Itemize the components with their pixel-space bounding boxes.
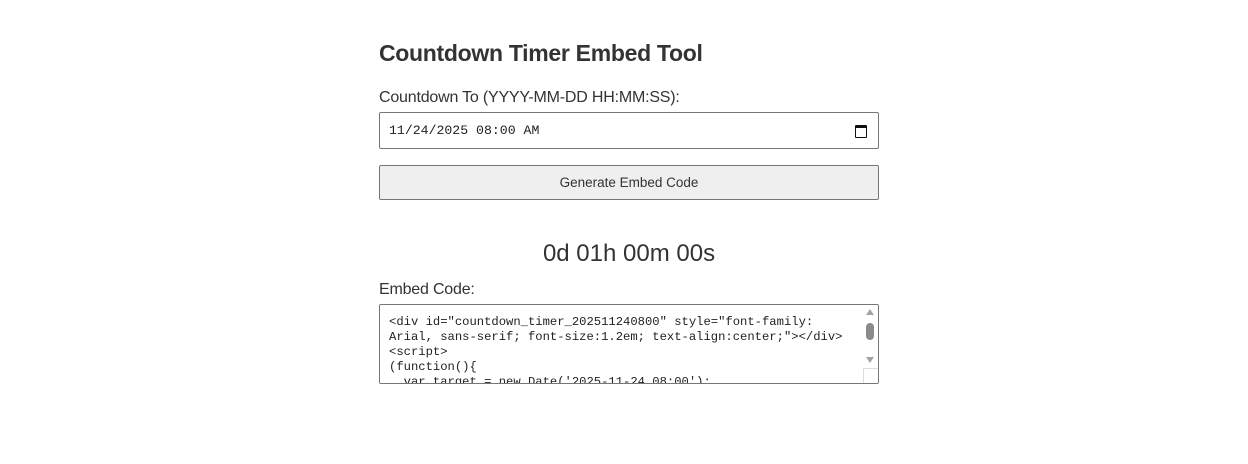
title: Countdown Timer Embed Tool: [379, 40, 703, 66]
label: countdown to: Countdown To (YYYY-MM-DD HH:MM:SS):: [379, 89, 680, 106]
icon: calendar: [855, 125, 867, 138]
date input: [379, 112, 879, 149]
button: generate: Generate Embed Code: [560, 175, 698, 190]
countdown display: 0d 01h 00m 00s: [543, 240, 715, 267]
scrollbar: [863, 305, 878, 383]
button: generate: [379, 165, 879, 200]
date input: 11/24/2025 08:00 AM: [389, 123, 539, 138]
label: embed code: Embed Code:: [379, 281, 475, 298]
